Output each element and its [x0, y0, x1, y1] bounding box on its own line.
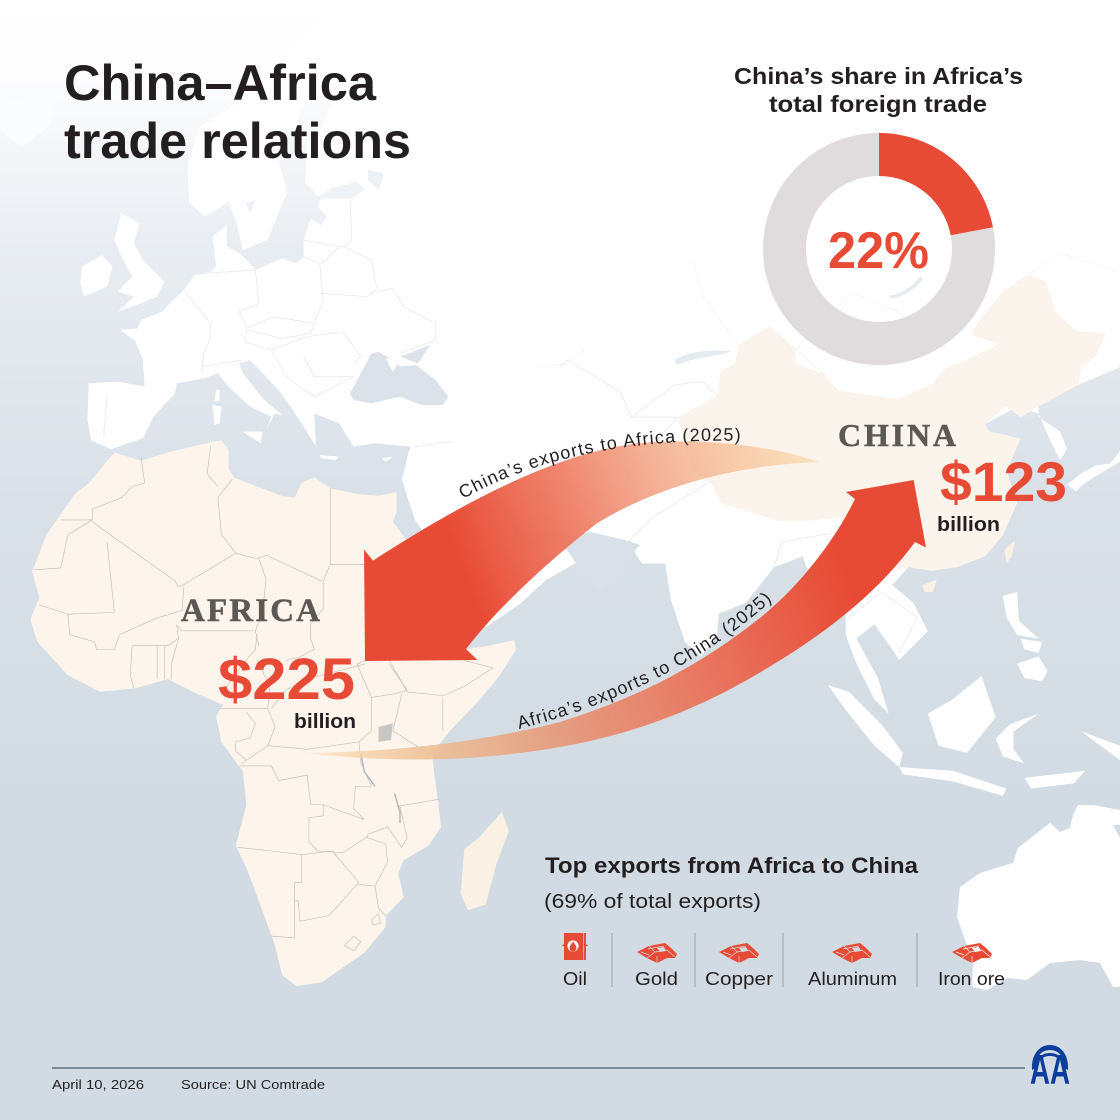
value: China $123 billion: billion [937, 513, 1000, 536]
exports heading: Top exports from Africa to China [545, 853, 919, 878]
land: Europe [80, 0, 571, 480]
icon: oil barrel [562, 933, 588, 960]
donut heading: total foreign trade [769, 91, 987, 117]
donut segment 22% [879, 133, 993, 235]
label: Gold: Gold [635, 968, 678, 989]
land: China [678, 274, 1106, 592]
icon: aluminum bars [832, 943, 872, 963]
land: Australia [957, 805, 1120, 990]
donut heading: China’s share in Africa’s [734, 63, 1023, 89]
donut chart: China's share [734, 63, 1023, 344]
icon: iron ore bars [952, 943, 992, 963]
footer [52, 1045, 1070, 1093]
land: Africa [30, 440, 516, 986]
arrow label: China's exports: China’s exports to Africa (2025) [460, 428, 740, 497]
arrow: China to Africa [364, 441, 819, 661]
seas: Black Sea and Caspian [246, 170, 541, 445]
title: trade relations [64, 113, 411, 169]
label: Iron ore: Iron ore [938, 968, 1005, 989]
panel: top exports [544, 853, 1005, 989]
icon: copper bars [719, 943, 759, 963]
footer date: April 10, 2026 [52, 1077, 144, 1092]
title: China–Africa [64, 55, 377, 111]
label: Copper: Copper [705, 968, 773, 989]
donut ring [784, 154, 974, 344]
donut heading [734, 63, 1023, 117]
donut value: 22% [828, 222, 929, 280]
arrow: Africa to China [307, 480, 926, 759]
title [64, 55, 411, 169]
logo: AA [1030, 1045, 1070, 1093]
value: China $123 billion: $123 [940, 450, 1067, 513]
exports subheading: (69% of total exports) [544, 891, 761, 913]
footer source: Source: UN Comtrade [181, 1077, 325, 1092]
logo: AA: AA [1030, 1046, 1070, 1093]
label: Africa: AFRICA [181, 593, 320, 629]
label: Oil: Oil [563, 968, 587, 989]
icon: gold bars [637, 943, 677, 963]
land: Asia [453, 0, 1120, 796]
value: Africa $225 billion: $225 [218, 647, 355, 712]
value: Africa $225 billion: billion [294, 710, 356, 733]
label: China: CHINA [838, 417, 956, 453]
label: Aluminum: Aluminum [808, 968, 897, 989]
land: Iceland [0, 93, 55, 147]
arrow label: Africa's exports: Africa’s exports to China (2025) [519, 593, 772, 729]
land: Arabia [402, 450, 576, 627]
seas: Persian Gulf and Gulf of Oman [493, 501, 640, 590]
